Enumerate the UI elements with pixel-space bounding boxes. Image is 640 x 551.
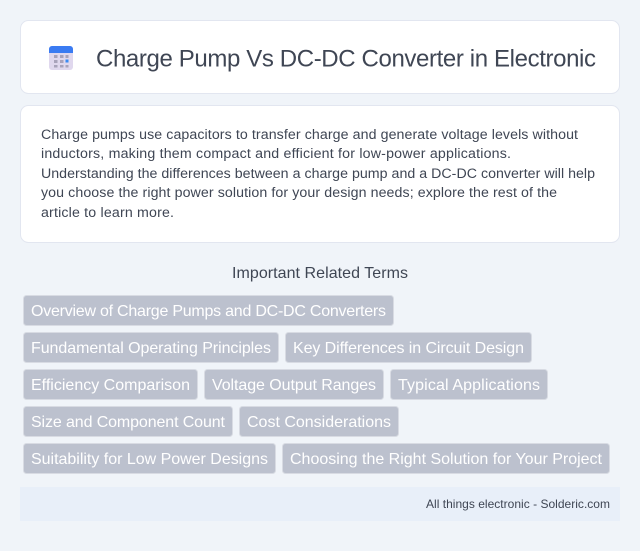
related terms tags bbox=[24, 296, 610, 474]
tag bbox=[24, 444, 276, 474]
footer bbox=[20, 487, 620, 521]
heading: important related terms: Important Related Terms bbox=[232, 265, 408, 282]
tag bbox=[24, 296, 394, 326]
tag: Fundamental Operating Principles bbox=[31, 340, 271, 357]
tag: Key Differences in Circuit Design bbox=[293, 340, 524, 357]
tag bbox=[24, 406, 232, 436]
header panel bbox=[20, 20, 620, 94]
tag bbox=[24, 332, 278, 362]
tag bbox=[240, 406, 398, 436]
tag bbox=[24, 370, 198, 400]
tag bbox=[282, 444, 610, 474]
tag: Voltage Output Ranges bbox=[212, 377, 376, 394]
description text: inductors, making them compact and efficient for low-power applications. bbox=[41, 146, 511, 162]
title: Charge Pump Vs DC-DC Converter in Electronic bbox=[96, 46, 596, 72]
panel: description bbox=[20, 106, 620, 242]
tag: Cost Considerations bbox=[247, 414, 391, 431]
tag: Choosing the Right Solution for Your Project bbox=[290, 451, 603, 468]
icon: calendar grid bbox=[49, 46, 73, 70]
tag: Overview of Charge Pumps and DC-DC Converters bbox=[31, 303, 386, 320]
tag: Size and Component Count bbox=[31, 414, 226, 431]
description text: you choose the right power solution for your design needs; explore the rest of the bbox=[41, 185, 557, 201]
description text: Charge pumps use capacitors to transfer charge and generate voltage levels without bbox=[41, 127, 578, 143]
tag bbox=[204, 370, 384, 400]
tag: Typical Applications bbox=[398, 377, 540, 394]
description text: Understanding the differences between a charge pump and a DC-DC converter will help bbox=[41, 166, 595, 182]
description text bbox=[41, 127, 595, 221]
tag: Efficiency Comparison bbox=[31, 377, 190, 394]
tag bbox=[390, 370, 548, 400]
footer credit: All things electronic - Solderic.com bbox=[426, 497, 610, 511]
description text: article to learn more. bbox=[41, 205, 174, 221]
tag bbox=[286, 332, 532, 362]
tag: Suitability for Low Power Designs bbox=[31, 451, 268, 468]
